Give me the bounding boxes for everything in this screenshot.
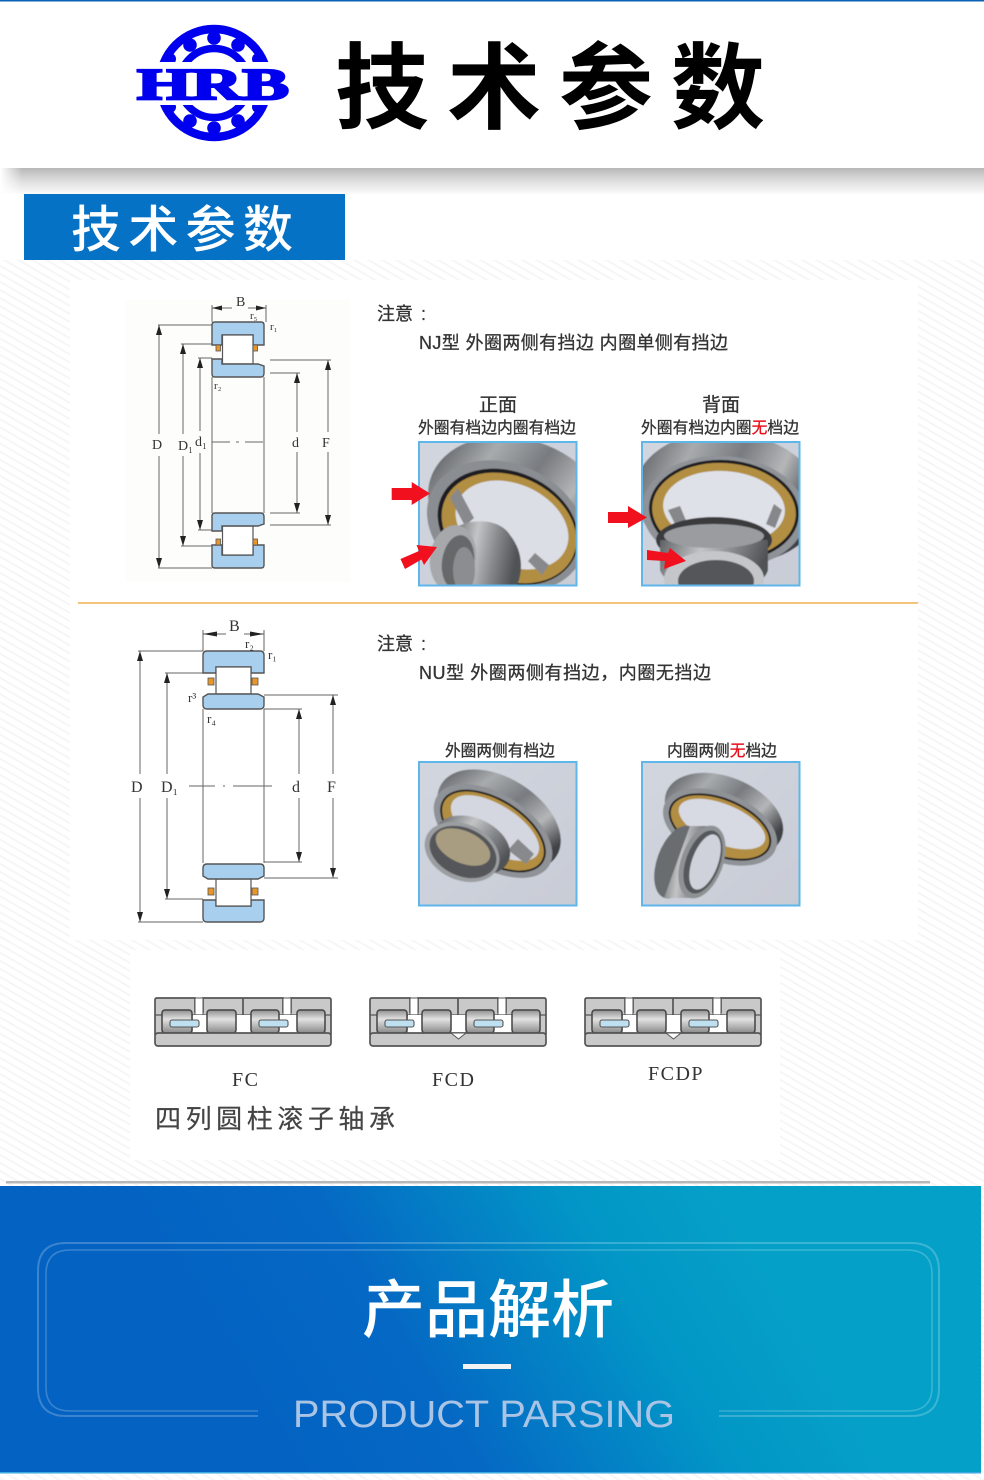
NU cross-section drawing: D xyxy=(131,779,143,796)
four-row bearing FCD: FCD xyxy=(432,1069,475,1091)
divider xyxy=(78,602,918,604)
NJ cross-section drawing: r₁ xyxy=(270,321,278,333)
top section xyxy=(203,651,264,709)
NJ cross-section drawing: d₁ xyxy=(195,435,207,450)
section tab xyxy=(24,194,345,260)
NU note: NU型 外圈两侧有挡边，内圈无挡边 xyxy=(419,663,711,683)
NU cross-section drawing: D₁ xyxy=(161,779,178,796)
NU cross-section drawing: r₁ xyxy=(268,647,277,662)
photo: NU bearing with inner ring xyxy=(418,761,578,906)
banner frame xyxy=(38,1243,939,1416)
NJ cross-section drawing: r₂ xyxy=(214,380,222,392)
NJ note: NJ型 外圈两侧有挡边 内圈单侧有挡边 xyxy=(419,333,728,353)
NU note xyxy=(377,634,711,683)
four-row caption: 四列圆柱滚子轴承 xyxy=(155,1104,395,1134)
photo caption: inner ring: 内圈两侧无档边 xyxy=(667,742,777,760)
back photo caption: 外圈有档边内圈无档边 xyxy=(641,419,799,437)
four-row bearing FCDP: FCDP xyxy=(648,1063,704,1085)
front photo caption xyxy=(418,395,576,437)
NJ cross-section drawing: D₁ xyxy=(178,439,193,454)
banner title: 产品解析 xyxy=(362,1276,614,1346)
bottom section xyxy=(212,513,264,568)
four-row bearing FC: FC xyxy=(232,1069,259,1091)
four-row bearing FC xyxy=(155,998,331,1091)
NU cross-section drawing: d xyxy=(292,779,300,796)
NJ note: 注意 : xyxy=(377,304,426,324)
NU cross-section drawing: B xyxy=(229,618,240,635)
NJ cross-section drawing: F xyxy=(322,436,330,451)
photo: NJ bearing front xyxy=(418,441,578,586)
section tab: 技术参数 xyxy=(71,202,293,258)
NJ cross-section drawing: d xyxy=(292,436,299,451)
header band xyxy=(0,0,984,194)
banner: product parsing xyxy=(0,1186,981,1474)
photo: NU bearing inner ring no flange xyxy=(641,757,800,906)
NU note: 注意 : xyxy=(377,634,426,654)
back photo caption: 背面 xyxy=(702,394,740,416)
main title: 技术参数 xyxy=(335,36,765,141)
NJ cross-section drawing xyxy=(125,295,350,582)
HRB logo: HRB xyxy=(137,60,289,109)
four-row bearing FCD xyxy=(370,998,546,1091)
NJ cross-section drawing: B xyxy=(236,295,245,310)
NU cross-section drawing xyxy=(131,618,338,922)
NU cross-section drawing: r₄ xyxy=(207,711,216,726)
grey rule xyxy=(6,1181,930,1184)
top section xyxy=(212,322,264,377)
NU cross-section drawing: F xyxy=(327,779,336,796)
NU cross-section drawing: r₂ xyxy=(245,636,254,651)
HRB logo xyxy=(137,29,289,137)
photo caption: outer ring: 外圈两侧有档边 xyxy=(445,742,555,760)
NJ note xyxy=(377,304,728,353)
bottom section xyxy=(203,864,264,922)
front photo caption: 正面 xyxy=(479,395,517,416)
banner dash xyxy=(463,1364,511,1369)
back photo caption xyxy=(641,394,799,437)
NJ cross-section drawing: r₅ xyxy=(250,310,258,322)
four-row bearing FCDP xyxy=(585,998,761,1085)
NU cross-section drawing: r³ xyxy=(188,690,196,705)
NJ cross-section drawing: D xyxy=(152,438,162,453)
photo: NJ bearing back xyxy=(641,441,800,586)
red arrows xyxy=(392,482,686,569)
banner subtitle: PRODUCT PARSING xyxy=(293,1394,675,1436)
front photo caption: 外圈有档边内圈有档边 xyxy=(418,419,576,437)
